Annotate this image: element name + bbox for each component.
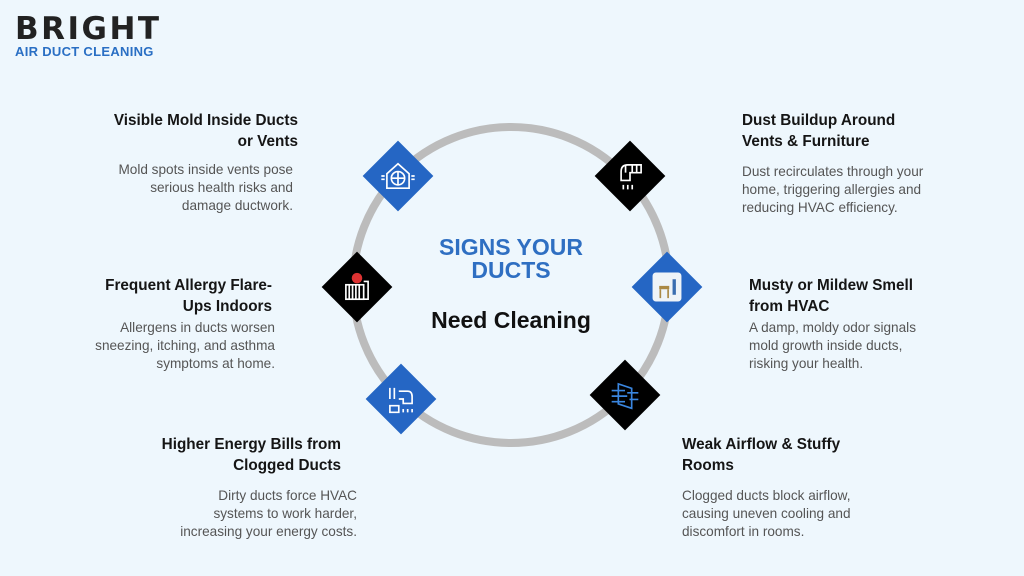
text: allergy: Frequent Allergy Flare- [105,277,272,294]
text: energy bills: Clogged Ducts [233,457,341,474]
text: weak airflow: Clogged ducts block airflow, [682,488,851,503]
text: musty smell: mold growth inside ducts, [749,338,902,353]
text: visible mold: Visible Mold Inside Ducts [114,112,298,129]
text: visible mold: damage ductwork. [182,198,293,213]
icon: weak airflow [590,360,660,430]
text: energy bills: increasing your energy costs. [180,524,357,539]
text: visible mold [114,112,298,213]
text: musty smell: Musty or Mildew Smell [749,277,913,294]
text: dust buildup: Dust Buildup Around [742,112,895,129]
text: musty smell: from HVAC [749,298,829,315]
text: allergy [95,277,275,371]
icon: smell room [632,252,702,322]
text: visible mold: or Vents [238,133,298,150]
text: musty smell [749,277,916,371]
center heading: DUCTS [471,257,551,283]
text: weak airflow [682,436,851,539]
text: musty smell: risking your health. [749,356,863,371]
text: weak airflow: Rooms [682,457,734,474]
text: dust buildup: Vents & Furniture [742,133,870,150]
text: weak airflow: discomfort in rooms. [682,524,804,539]
center heading: SIGNS YOUR [439,234,583,260]
text: allergy: symptoms at home. [156,356,275,371]
text: weak airflow: Weak Airflow & Stuffy [682,436,840,453]
text: visible mold: serious health risks and [150,180,293,195]
text: dust buildup: home, triggering allergies and [742,182,921,197]
icon: allergy filter [322,252,392,322]
text: dust buildup: Dust recirculates through your [742,164,923,179]
icon: duct dust [595,141,665,211]
text: dust buildup: reducing HVAC efficiency. [742,200,898,215]
text: allergy: sneezing, itching, and asthma [95,338,275,353]
text: visible mold: Mold spots inside vents pose [118,162,293,177]
logo: BRIGHT [15,11,162,47]
text: weak airflow: causing uneven cooling and [682,506,851,521]
text: energy bills: systems to work harder, [213,506,357,521]
text: allergy: Allergens in ducts worsen [120,320,275,335]
center heading [431,234,591,333]
center heading: Need Cleaning [431,307,591,333]
text: allergy: Ups Indoors [183,298,272,315]
logo: AIR DUCT CLEANING [15,44,154,59]
text: dust buildup [742,112,924,215]
text: energy bills [162,436,357,539]
text: musty smell: A damp, moldy odor signals [749,320,916,335]
text: energy bills: Higher Energy Bills from [162,436,341,453]
icon: mold vent [363,141,433,211]
icon: energy duct [366,364,436,434]
text: energy bills: Dirty ducts force HVAC [218,488,357,503]
